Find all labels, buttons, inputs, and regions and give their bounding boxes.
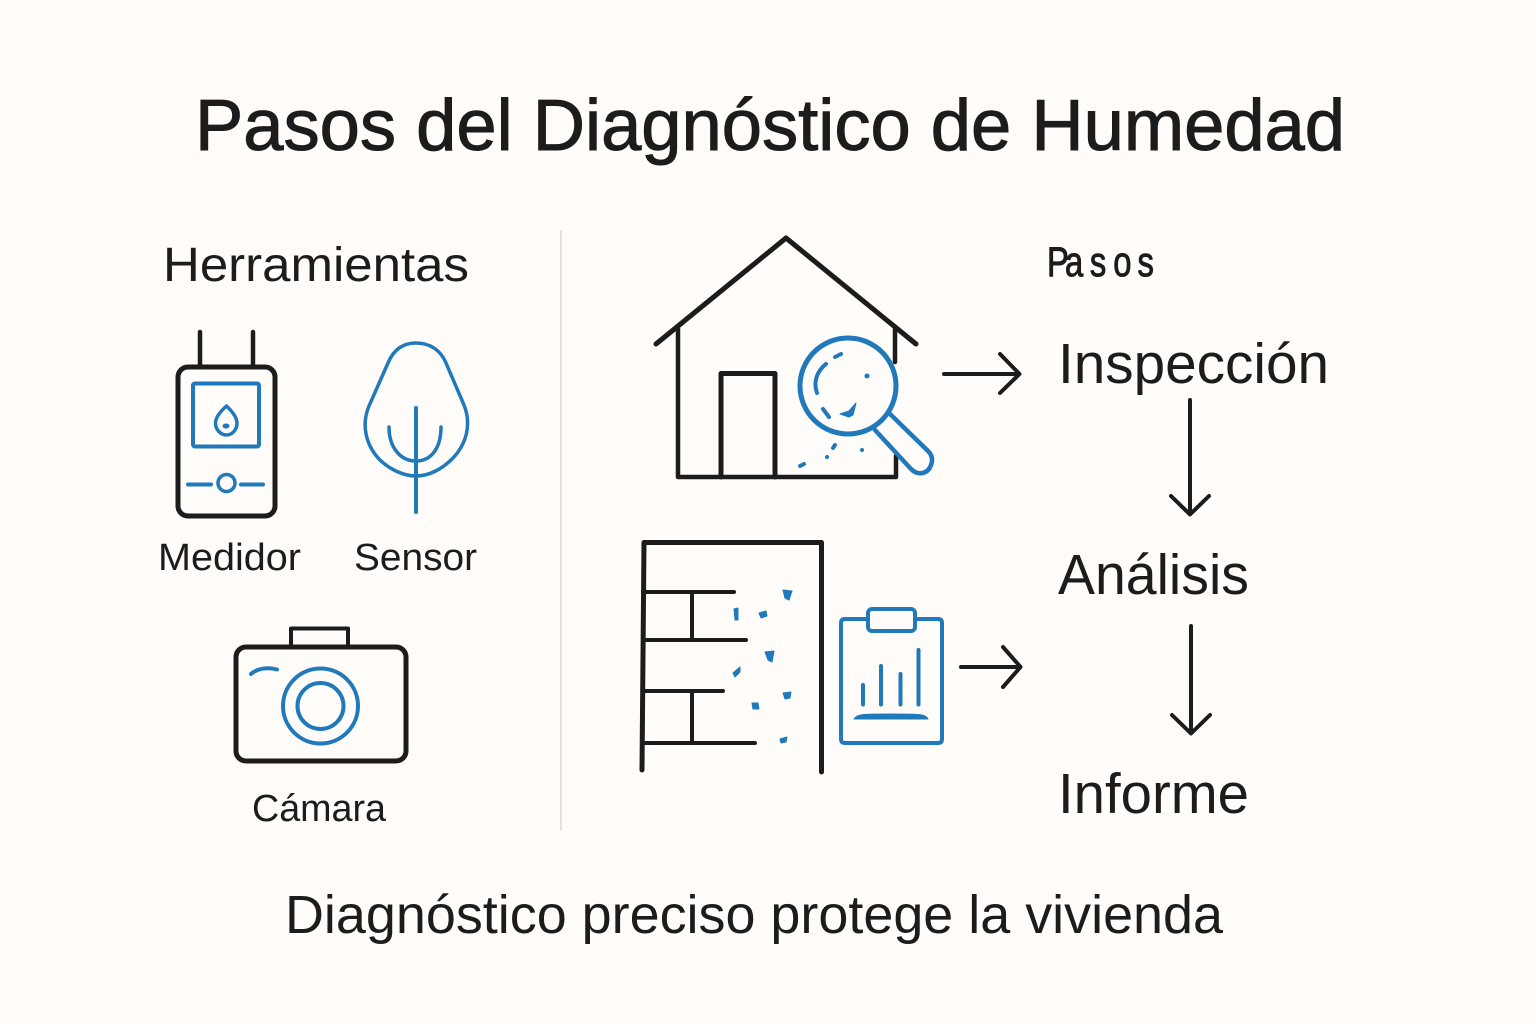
label: sensor: Sensor [354, 537, 477, 579]
arrow: analysis to report [1172, 626, 1210, 734]
arrow: house to inspection [944, 354, 1020, 393]
heading: tools: Herramientas [163, 239, 469, 292]
icon: camera [236, 628, 406, 761]
step: report: Informe [1058, 762, 1249, 826]
icon: moisture meter [178, 332, 275, 516]
icon: damp brick wall [642, 542, 822, 772]
title: Pasos del Diagnóstico de Humedad [195, 86, 1345, 166]
label: meter: Medidor [158, 537, 301, 579]
footer tagline: Diagnóstico preciso protege la vivienda [285, 885, 1224, 945]
icon: house with magnifier [656, 238, 932, 477]
heading: steps: Pasos [1047, 238, 1154, 285]
step: analysis: Análisis [1058, 543, 1249, 607]
icon: clipboard report [841, 609, 942, 743]
arrow: inspection to analysis [1171, 400, 1209, 514]
label: camera: Cámara [252, 788, 387, 830]
arrow: wall to analysis [961, 647, 1020, 687]
step: inspection: Inspección [1058, 332, 1329, 396]
icon: sensor [365, 343, 468, 512]
